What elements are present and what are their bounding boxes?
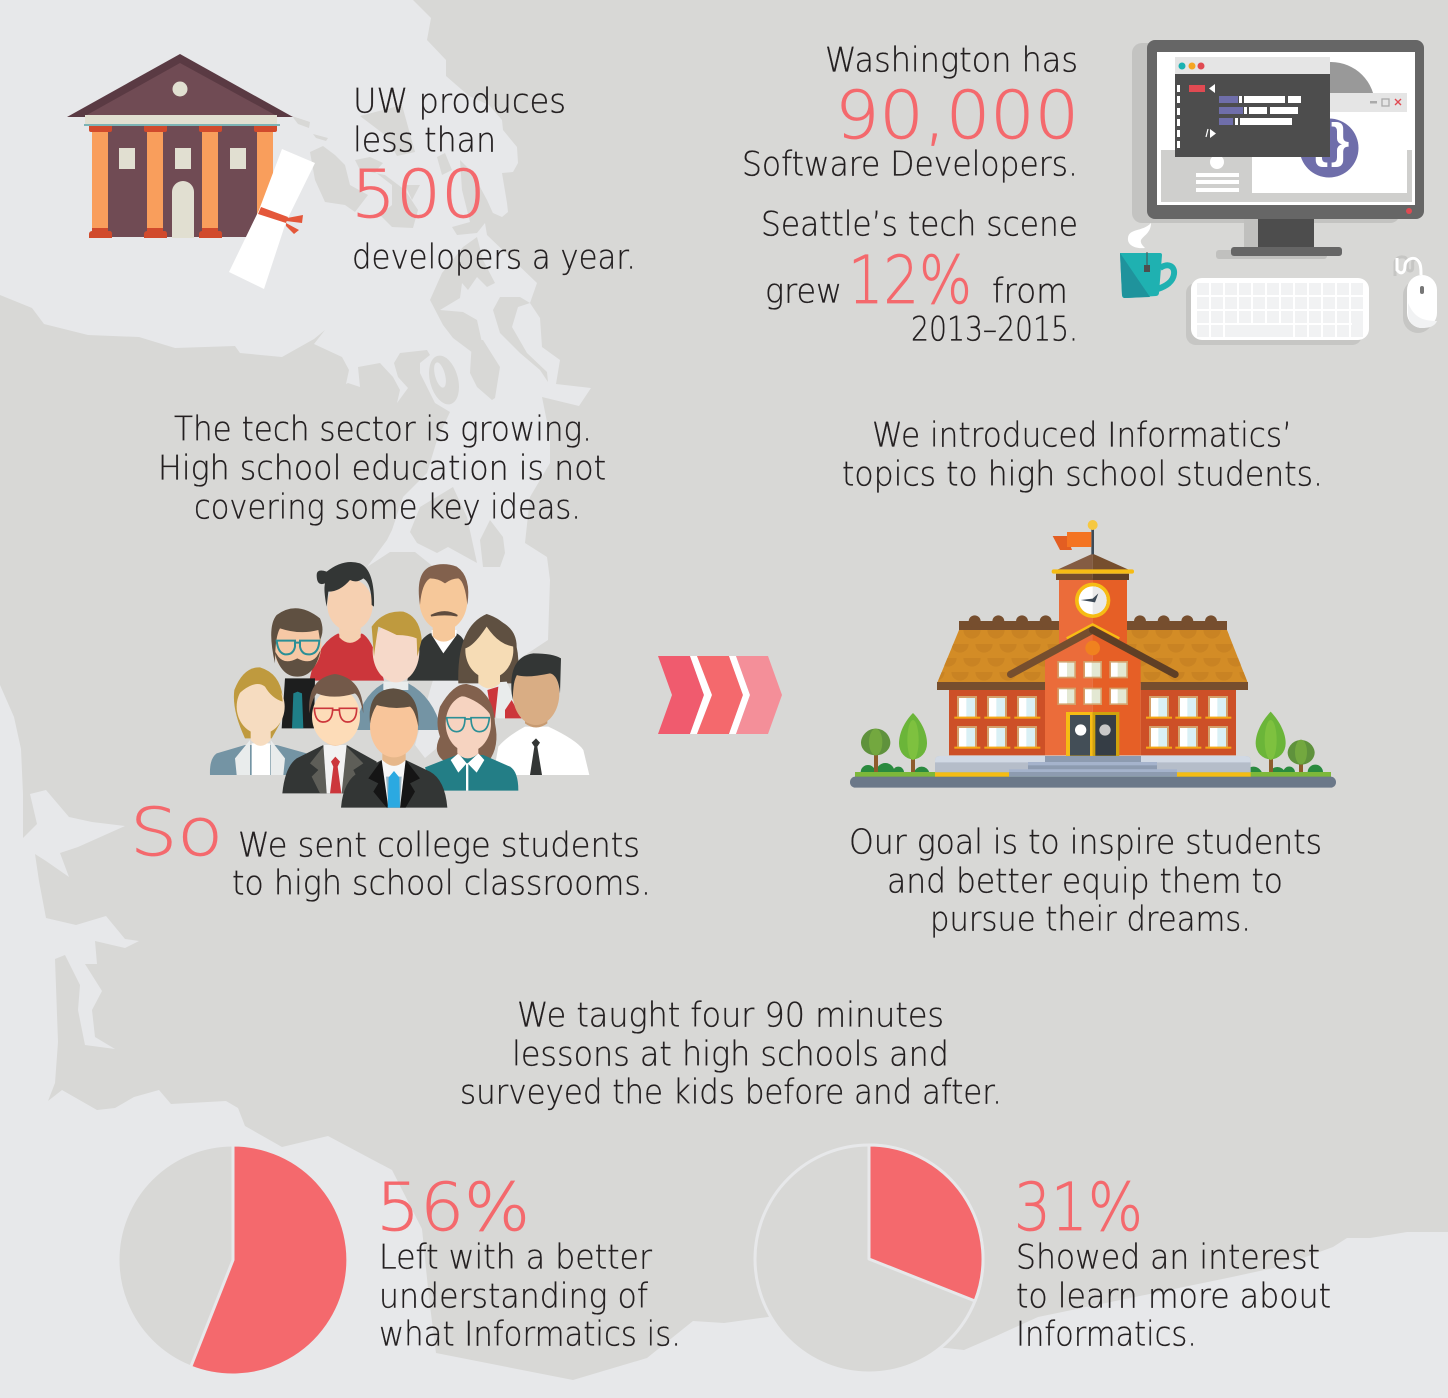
text: UW produces: UW produces [353, 82, 566, 122]
icon: desktop computer with mug, keyboard, mouse: } [1331, 115, 1349, 168]
text: Washington developers: Seattle’s tech scene [761, 204, 1078, 244]
person: beard and teal glasses [271, 608, 322, 728]
text: our goal: Our goal is to inspire students [849, 822, 1322, 862]
arrow: triple chevron [658, 656, 782, 734]
text: 56% better understanding: 56% [376, 1169, 530, 1246]
text: our goal: pursue their dreams. [930, 900, 1251, 940]
text: So we sent college students: We sent college students [238, 826, 640, 866]
text: 56% better understanding: Left with a better [379, 1238, 652, 1278]
icon: desktop computer with mug, keyboard, mouse [1120, 40, 1437, 345]
person: woman with teal glasses [425, 684, 518, 791]
text: UW produces: developers a year. [352, 238, 636, 278]
icon: university building with diploma [67, 54, 315, 289]
text: Washington developers: Software Developers. [742, 144, 1078, 184]
clock tower [1052, 520, 1134, 648]
pie chart: 56% [118, 1145, 348, 1375]
text: we introduced Informatics: topics to high school students. [842, 454, 1323, 494]
trees left and right [861, 712, 1323, 772]
text: Washington developers: 12% [848, 242, 972, 319]
icon: group of people [210, 562, 589, 808]
text: Washington developers [742, 40, 1079, 350]
icon: school building [850, 520, 1336, 788]
text: 31% interest: Informatics. [1016, 1314, 1197, 1354]
person: dark-haired man in white shirt [493, 653, 589, 775]
text: we taught four lessons: We taught four 90 minutes [517, 996, 944, 1036]
text: Washington developers: 2013–2015. [911, 310, 1078, 350]
text: our goal [849, 822, 1322, 940]
central building [1011, 624, 1175, 756]
text: we introduced Informatics: We introduced Informatics’ [872, 416, 1292, 456]
text: UW produces: 500 [351, 156, 486, 233]
text: 31% interest: to learn more about [1016, 1276, 1331, 1316]
ground and road [850, 772, 1336, 788]
text: 56% better understanding: what Informatics is. [379, 1314, 681, 1354]
person: blond woman in grey jacket [210, 667, 307, 775]
person: man with red glasses [282, 674, 377, 793]
text: 31% interest [1014, 1169, 1331, 1354]
person: blond man in blue suit [355, 612, 442, 730]
icon: desktop computer with mug, keyboard, mouse: { [1310, 115, 1328, 168]
text: 31% interest: Showed an interest [1016, 1238, 1320, 1278]
text: UW produces: less than [353, 120, 496, 160]
text: we taught four lessons: surveyed the kids before and after. [460, 1072, 1002, 1112]
text: 56% better understanding: understanding of [379, 1276, 648, 1316]
text: Washington developers: Washington has [825, 40, 1078, 80]
text: Washington developers: from [992, 272, 1068, 312]
text: 56% better understanding [376, 1169, 681, 1354]
wing windows [954, 696, 1231, 749]
text: So we sent college students [130, 794, 651, 904]
roof [937, 615, 1248, 690]
text: our goal: and better equip them to [887, 862, 1283, 902]
wings [949, 690, 1236, 755]
pie chart: 31% [755, 1145, 983, 1373]
text: we taught four lessons [460, 996, 1002, 1112]
person: woman with long brown hair [458, 614, 523, 718]
text: UW produces [351, 82, 636, 278]
text: we taught four lessons: lessons at high schools and [512, 1034, 949, 1074]
text: So we sent college students: So [130, 794, 223, 871]
text: we introduced Informatics [842, 416, 1323, 494]
text: 31% interest: 31% [1014, 1169, 1143, 1246]
person: black vest with mustache [407, 564, 468, 681]
person: front man with blue tie [341, 688, 447, 808]
text: tech sector is growing: High school education is not [158, 448, 606, 488]
text: So we sent college students: to high school classrooms. [232, 864, 651, 904]
text: Washington developers: grew [765, 272, 842, 312]
text: tech sector is growing: covering some key ideas. [194, 488, 581, 528]
text: tech sector is growing [158, 410, 606, 528]
person: red shirt [309, 562, 384, 681]
text: tech sector is growing: The tech sector is growing. [174, 410, 592, 450]
steps and plinth [935, 756, 1251, 777]
text: Washington developers: 90,000 [835, 77, 1079, 154]
